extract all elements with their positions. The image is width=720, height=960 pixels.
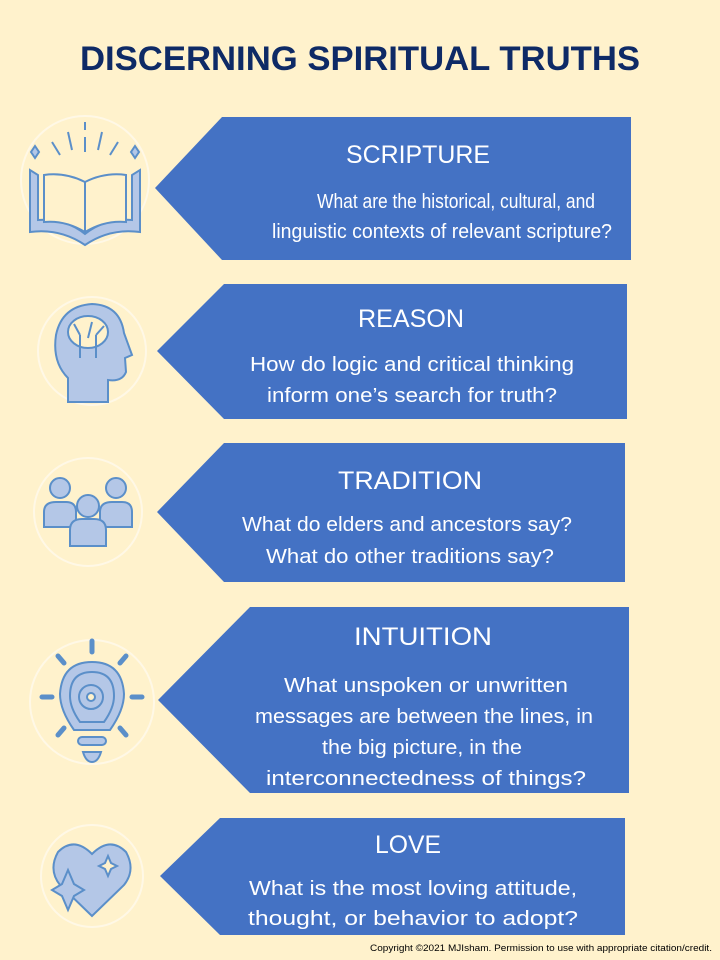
- panel: love: What is the most loving attitude,: [249, 878, 577, 900]
- panel: love: thought, or behavior to adopt?: [248, 908, 578, 930]
- panel: intuition: messages are between the lines, in: [255, 706, 593, 728]
- panel: scripture: What are the historical, cultural, and: [317, 191, 595, 213]
- icon: lightbulb: [30, 640, 154, 764]
- icon: open book: [21, 116, 149, 245]
- copyright: Copyright ©2021 MJIsham. Permission to use with appropriate citation/credit.: [370, 943, 712, 953]
- panel: intuition: [158, 607, 629, 793]
- panel: tradition: What do elders and ancestors say?: [242, 514, 572, 536]
- panel: love: [160, 818, 625, 935]
- panel: scripture: [155, 117, 631, 260]
- panel: reason: [157, 284, 627, 419]
- panel: intuition: INTUITION: [354, 623, 492, 651]
- panel: scripture: SCRIPTURE: [346, 141, 490, 169]
- panel: reason: inform one’s search for truth?: [267, 385, 557, 407]
- panel: reason: REASON: [358, 305, 464, 333]
- panel: tradition: [157, 443, 625, 582]
- title: DISCERNING SPIRITUAL TRUTHS: [80, 40, 640, 78]
- panel: tradition: TRADITION: [338, 467, 482, 495]
- icon: people: [34, 458, 142, 566]
- panel: tradition: What do other traditions say?: [266, 546, 554, 568]
- panel: intuition: What unspoken or unwritten: [284, 675, 568, 697]
- panel: intuition: interconnectedness of things?: [266, 768, 586, 790]
- panel: scripture: linguistic contexts of relevant scripture?: [272, 221, 612, 243]
- icon: head with brain: [38, 297, 146, 405]
- icon: heart: [41, 825, 143, 927]
- panel: love: LOVE: [375, 831, 441, 859]
- panel: reason: How do logic and critical thinking: [250, 354, 574, 376]
- panel: intuition: the big picture, in the: [322, 737, 522, 759]
